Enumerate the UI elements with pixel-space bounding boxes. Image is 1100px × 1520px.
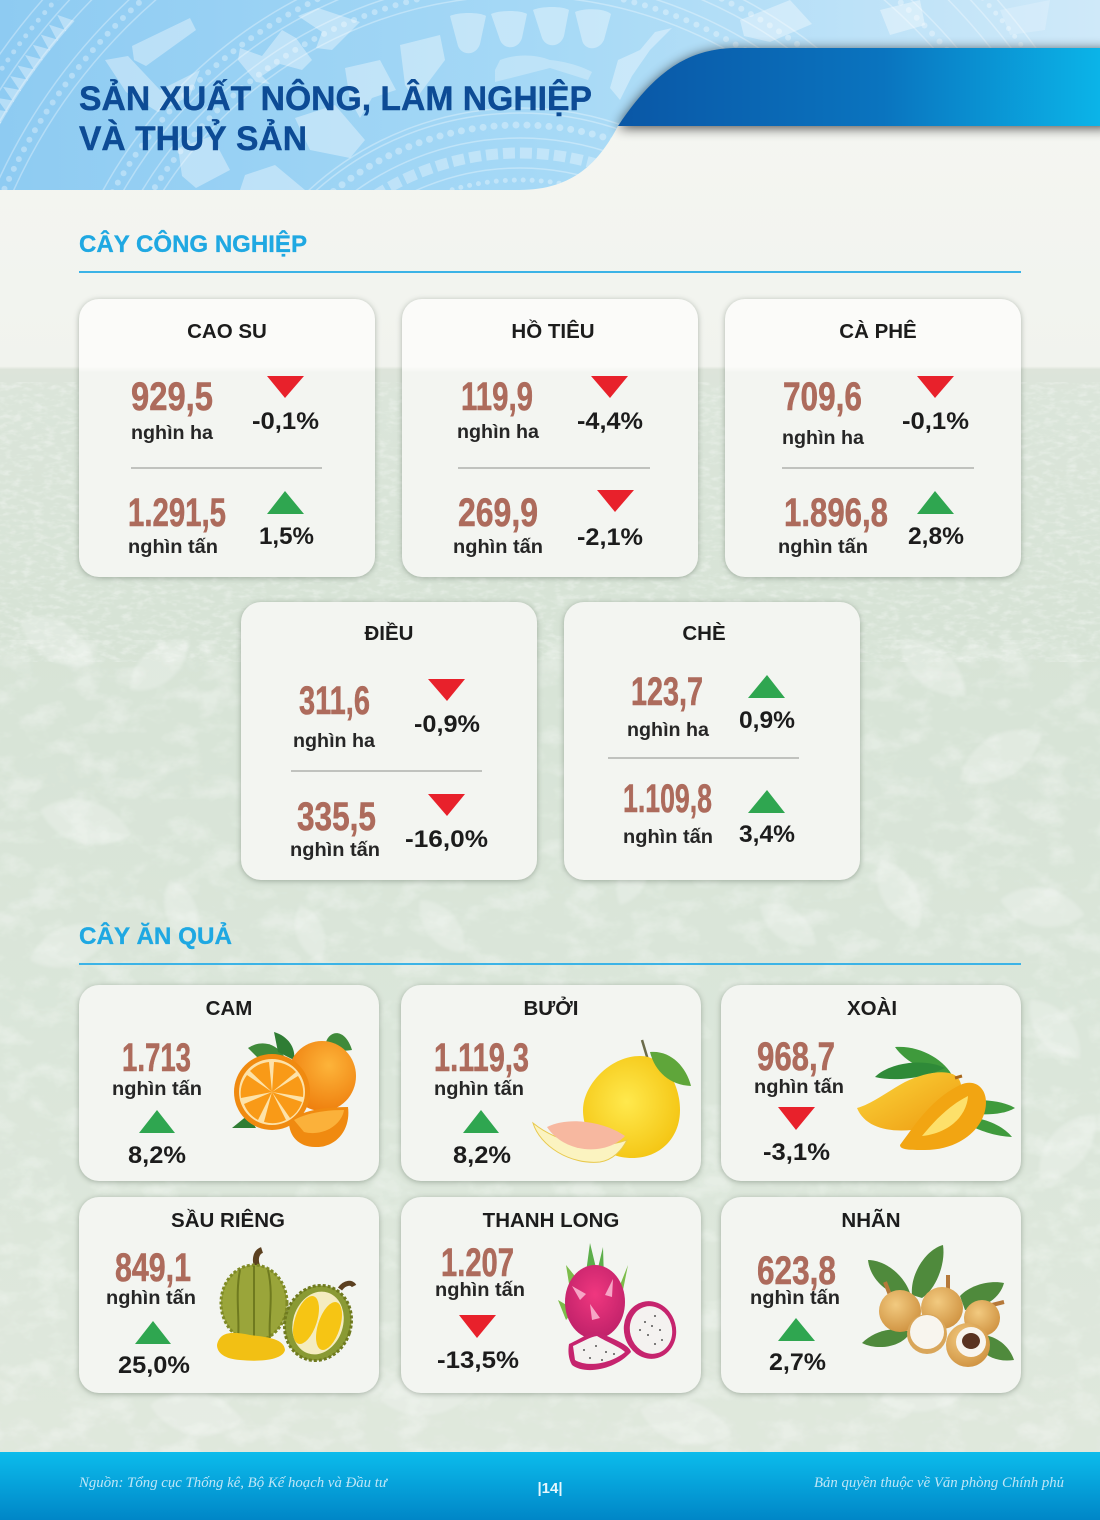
panel: chè: 1.109,8 [623,777,712,821]
panel: điều: 311,6 [299,679,370,723]
panel: bưởi [401,985,701,1181]
panel: bưởi: 1.119,3 [434,1036,529,1080]
panel: cà phê: 709,6 [783,375,862,419]
panel: cà phê: -0,1% [902,408,969,435]
icon: dragon fruit [558,1243,683,1370]
panel: xoài: -3,1% [763,1139,830,1166]
panel: chè: 3,4% [739,821,795,848]
panel: hồ tiêu: 119,9 [461,375,533,419]
panel: thanh long: -13,5% [437,1347,519,1374]
panel: chè: 0,9% [739,707,795,734]
panel: hồ tiêu: 269,9 [458,491,538,535]
panel: bưởi: BƯỞI [524,996,578,1020]
footer bar: |14| [537,1480,563,1497]
panel: cà phê: 2,8% [908,523,964,550]
panel: chè: nghìn tấn [623,826,713,848]
icon: mango [857,1047,1015,1150]
panel: nhãn: NHÃN [841,1209,901,1232]
panel: cam: 1.713 [122,1036,191,1080]
panel: chè: 123,7 [631,670,703,714]
panel: nhãn: 623,8 [757,1249,836,1293]
panel: cam: CAM [206,997,252,1020]
icon: durian [217,1250,361,1369]
section heading: cây ăn quả: CÂY ĂN QUẢ [79,921,232,950]
panel: xoài: 968,7 [757,1035,835,1079]
panel: thanh long: THANH LONG [483,1209,619,1232]
footer bar: Nguồn: Tổng cục Thống kê, Bộ Kế hoạch và Đầu tư [78,1475,388,1491]
header ribbon [618,48,1100,128]
panel: bưởi: 8,2% [453,1142,511,1169]
panel: cà phê [725,299,1021,577]
panel: chè: CHÈ [682,622,726,645]
panel: cao su: nghìn tấn [128,536,218,558]
panel: cà phê: nghìn tấn [778,536,868,558]
panel: cam: nghìn tấn [112,1078,202,1100]
panel: cao su: nghìn ha [131,422,213,444]
panel: nhãn: nghìn tấn [750,1287,840,1309]
panel: điều: nghìn tấn [290,839,380,861]
panel: thanh long: nghìn tấn [435,1279,525,1301]
panel: điều: nghìn ha [293,730,375,752]
panel: điều: -0,9% [414,711,480,738]
panel: hồ tiêu [402,299,698,577]
panel: cà phê: nghìn ha [782,427,864,449]
title [79,79,592,158]
panel: cam: 8,2% [128,1142,186,1169]
panel: cam [79,985,379,1181]
header: light blue drum pattern panel [0,0,1100,190]
panel: cao su: CAO SU [187,320,267,343]
panel: cà phê: CÀ PHÊ [839,319,917,343]
title: VÀ THUỶ SẢN [79,120,307,158]
panel: chè: nghìn ha [627,719,709,741]
panel: cao su [79,299,375,577]
panel: cao su: 1,5% [259,523,314,550]
panel: thanh long [401,1197,701,1393]
icon: orange [232,1032,356,1147]
panel: xoài: XOÀI [847,997,897,1020]
panel: điều [241,602,537,880]
panel: sầu riêng: SẦU RIÊNG [171,1208,285,1232]
footer bar: Bản quyền thuộc về Văn phòng Chính phủ [814,1475,1064,1491]
panel: xoài [721,985,1021,1181]
panel: nhãn [721,1197,1021,1393]
panel: hồ tiêu: nghìn tấn [453,536,543,558]
panel: hồ tiêu: -4,4% [577,408,643,435]
panel: xoài: nghìn tấn [754,1076,844,1098]
panel: nhãn: 2,7% [769,1349,826,1376]
panel: cà phê: 1.896,8 [784,491,888,535]
panel: hồ tiêu: -2,1% [577,524,643,551]
section heading: cây công nghiệp: CÂY CÔNG NGHIỆP [79,230,307,258]
panel: sầu riêng: 849,1 [115,1246,191,1290]
panel: điều: ĐIỀU [365,622,413,645]
panel: thanh long: 1.207 [441,1241,514,1285]
panel: cao su: -0,1% [252,408,319,435]
title: SẢN XUẤT NÔNG, LÂM NGHIỆP [79,79,592,118]
panel: sầu riêng [79,1197,379,1393]
panel: chè [564,602,860,880]
panel: điều: 335,5 [297,795,376,839]
panel: hồ tiêu: HỒ TIÊU [511,319,595,343]
panel: sầu riêng: 25,0% [118,1352,190,1379]
footer bar [0,1452,1100,1520]
panel: bưởi: nghìn tấn [434,1078,524,1100]
panel: điều: -16,0% [405,826,488,853]
panel: hồ tiêu: nghìn ha [457,421,539,443]
panel: sầu riêng: nghìn tấn [106,1287,196,1309]
icon: longan [862,1245,1014,1367]
panel: cao su: 1.291,5 [128,491,226,535]
panel: cao su: 929,5 [131,375,213,419]
icon: pomelo [533,1040,691,1162]
